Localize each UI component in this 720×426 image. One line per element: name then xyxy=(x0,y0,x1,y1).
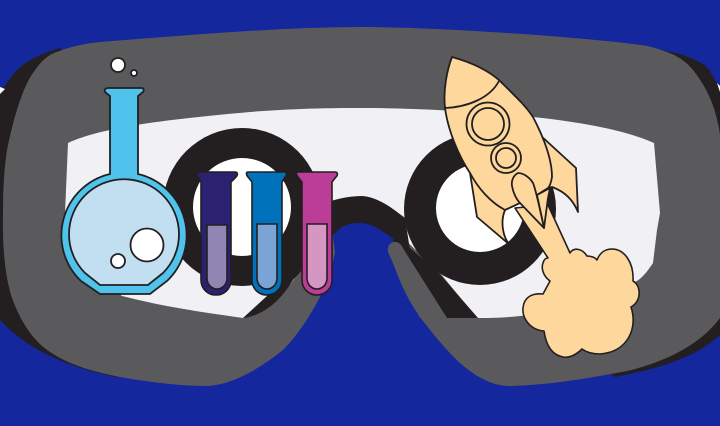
left fin xyxy=(470,173,510,245)
goggle shadow xyxy=(0,48,720,377)
rocket xyxy=(444,57,639,357)
right lens opening xyxy=(436,164,524,252)
rocket body xyxy=(444,57,552,210)
tube 1 xyxy=(197,172,237,295)
engine nozzle xyxy=(512,173,544,228)
right arm xyxy=(393,235,478,318)
right ring xyxy=(404,133,556,285)
tube 2 xyxy=(246,172,286,295)
small porthole xyxy=(491,143,521,173)
right fin xyxy=(540,135,578,212)
left ring xyxy=(163,128,321,286)
flask xyxy=(61,58,187,294)
left lens opening xyxy=(193,158,291,256)
tube 3 xyxy=(296,172,337,295)
nose cone line xyxy=(445,81,499,108)
bridge xyxy=(300,196,410,250)
large porthole xyxy=(466,102,510,146)
exhaust and cloud xyxy=(515,205,639,357)
test tubes xyxy=(197,172,337,295)
glasses frame xyxy=(163,128,556,318)
flask body xyxy=(61,88,187,294)
lens xyxy=(65,108,660,318)
flame strip xyxy=(537,188,550,228)
bubbles xyxy=(111,58,164,268)
nose pad xyxy=(388,242,447,318)
flask liquid xyxy=(69,179,179,285)
left arm xyxy=(243,225,333,318)
